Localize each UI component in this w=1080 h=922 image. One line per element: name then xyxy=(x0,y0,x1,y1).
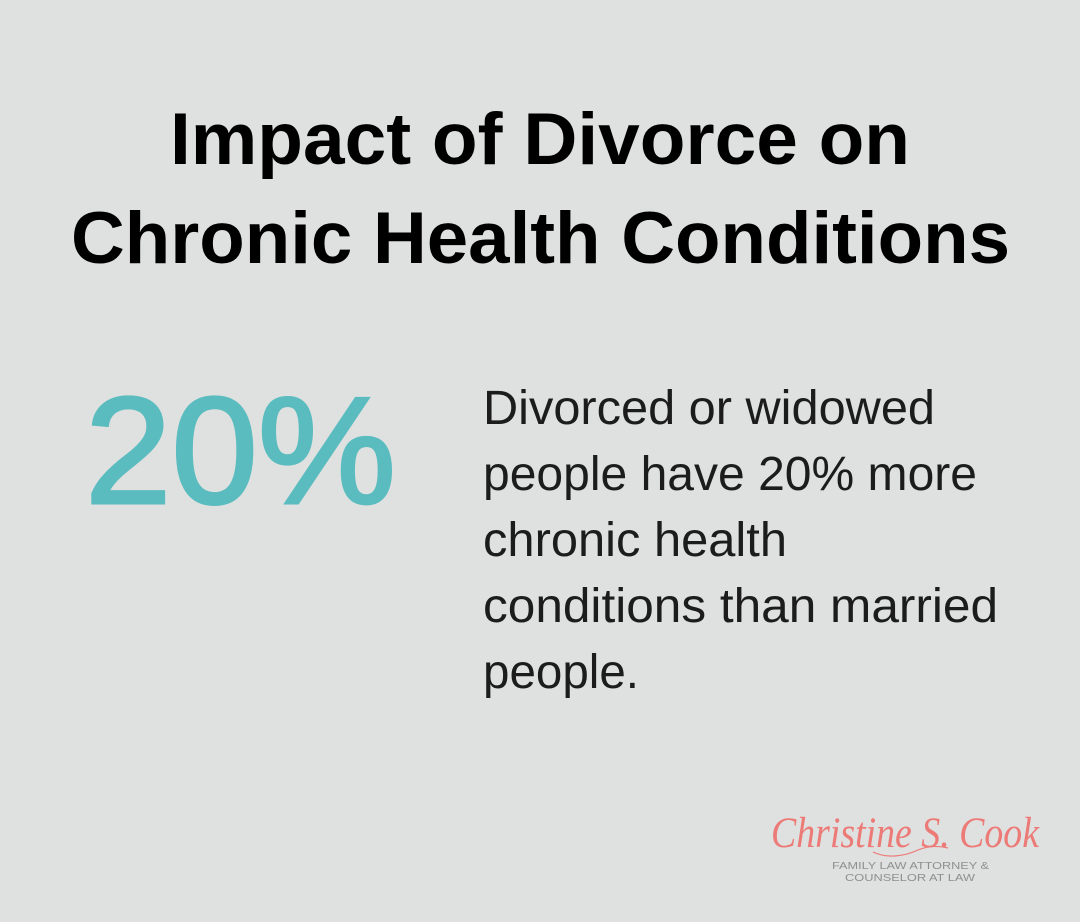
description text: conditions than married xyxy=(483,580,998,633)
logo tagline: COUNSELOR AT LAW xyxy=(845,872,975,884)
title xyxy=(71,99,1010,279)
description text: Divorced or widowed xyxy=(483,382,935,435)
description text: people have 20% more xyxy=(483,448,977,501)
description text: people. xyxy=(483,646,639,699)
logo tagline xyxy=(832,860,989,884)
logo name: Christine S. Cook xyxy=(771,810,1040,857)
description text: chronic health xyxy=(483,514,787,567)
title: Chronic Health Conditions xyxy=(71,198,1010,279)
logo tagline: FAMILY LAW ATTORNEY & xyxy=(832,860,989,872)
logo: Christine S. Cook xyxy=(771,810,1040,884)
logo swash xyxy=(873,846,948,856)
description text xyxy=(483,382,998,699)
big statistic: 20%: 20% xyxy=(85,366,396,536)
title: Impact of Divorce on xyxy=(170,99,910,180)
